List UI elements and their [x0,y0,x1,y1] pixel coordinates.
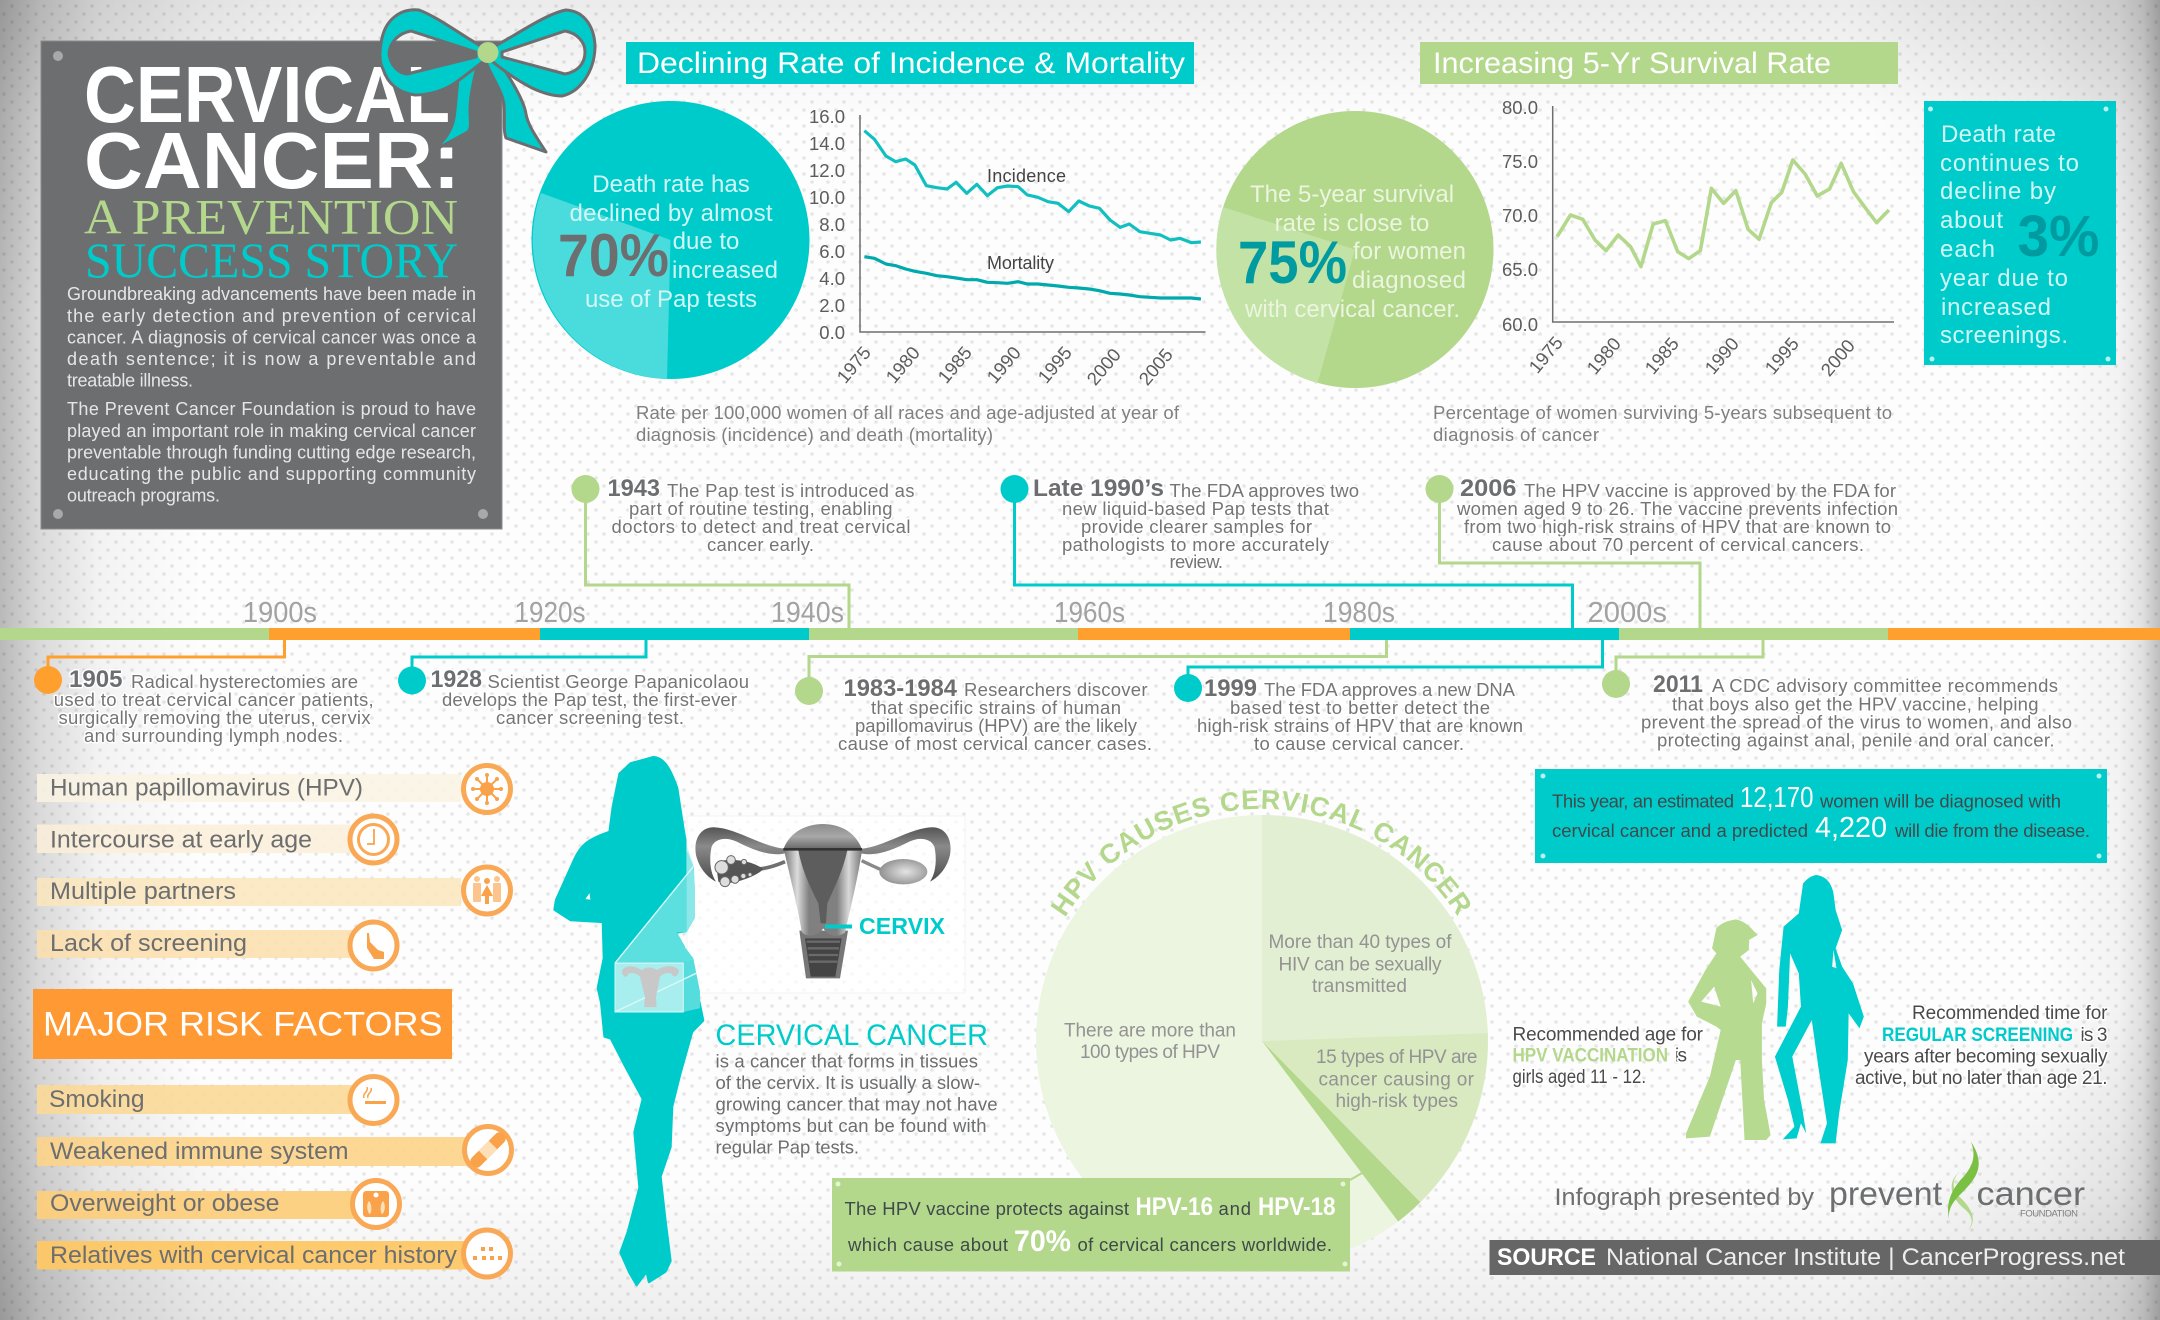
timeline [0,597,2160,640]
risk factor: human papillomavirus: Human papillomavirus (HPV) [50,774,363,802]
illustration: uterus diagram [695,824,951,978]
callout: estimated cases this year: women will be diagnosed with [1819,790,2061,812]
risk factor: intercourse at early age: Intercourse at early age [50,826,312,854]
magnifier: translucent view of the pelvis [615,851,700,1012]
pie label: 15 types [1316,1047,1478,1112]
pie label: 40 types [1268,932,1452,997]
logo: prevent cancer foundation: FOUNDATION [2020,1208,2078,1220]
source bar: SOURCE [1497,1244,1596,1271]
event: 1905: Radical hysterectomies are [131,671,358,692]
callout: death rate continues to decline 3%: year due to [1940,265,2068,292]
y axis labels: 75.0 [1502,151,1538,172]
ovaries [879,859,927,884]
event: 2011: prevent the spread of the virus to women, and also [1641,712,2072,732]
callout: death rate continues to decline 3%: screenings. [1940,322,2068,349]
event: 1943: part of routine testing, enabling [629,498,892,519]
x axis labels: 2000 [1816,335,1859,380]
event: 1999: high-risk strains of HPV that are known [1197,715,1523,736]
intro text: cancer. A diagnosis of cervical cancer was once a [67,328,477,348]
x axis labels: 2005 [1134,344,1177,389]
heading: major risk factors: MAJOR RISK FACTORS [43,1006,442,1044]
intro text: educating the public and supporting community [67,464,476,484]
caption: rate per 100,000: diagnosis (incidence) and death (mortality) [636,424,993,445]
risk factor: lack of screening: Lack of screening [50,930,247,957]
icon: cigarette [350,1076,397,1124]
heading: increasing 5-year survival rate [1420,42,1898,84]
callout: HPV vaccine protection: and [1218,1198,1251,1219]
callout: death rate continues to decline 3%: about [1940,207,2003,234]
callout: HPV vaccine protection: 70% [1014,1225,1071,1258]
intro text: preventable through funding cutting edge research, [67,442,476,462]
event: 1983-1984: cause of most cervical cancer cases. [838,733,1152,754]
event: late 1990s: review. [1170,551,1223,572]
pie label: 15 types: 15 types of HPV are [1316,1047,1478,1068]
text block: HPV vaccination age: is [1675,1046,1687,1066]
timeline bar [0,628,2160,640]
event: 1983-1984: 1983-1984 [844,675,958,702]
text block: regular screening: active, but no later than age 21. [1855,1068,2108,1089]
event: 1999: to cause cervical cancer. [1254,733,1464,754]
event: 2006: cause about 70 percent of cervical cancers. [1492,534,1864,555]
x axis labels: 1975 [1524,332,1567,377]
event: 2011 [1602,640,2072,750]
event: 2011: A CDC advisory committee recommends [1712,675,2058,696]
illustration: girl silhouette [1686,919,1771,1140]
event: 2006: The HPV vaccine is approved by the FDA for [1524,480,1896,501]
icon: teal ribbon bow [380,10,595,152]
event: late 1990s: new liquid-based Pap tests that [1062,498,1329,519]
line chart: survival rate [1502,97,1894,380]
intro text: the early detection and prevention of cervical [67,306,476,326]
callout: death rate continues to decline 3%: 3% [2018,204,2100,269]
y axis labels: 2.0 [819,295,845,316]
y axis labels: 12.0 [809,160,845,181]
event: 2006: from two high-risk strains of HPV that are known to [1464,516,1891,537]
callout: HPV vaccine protection: HPV-18 [1258,1193,1336,1221]
y axis labels [809,106,845,343]
event: late 1990s [1000,475,1572,628]
icon: hand [350,922,397,969]
event: 1999: The FDA approves a new DNA [1264,679,1516,700]
callout: estimated cases this year: This year, an estimated [1552,790,1734,812]
callout: HPV vaccine protection: HPV-16 [1136,1193,1213,1221]
event: 1905: surgically removing the uterus, cervix [58,707,371,728]
incidence line [864,131,1201,243]
callout: death rate continues to decline 3%: decline by [1940,178,2056,205]
intro text: treatable illness. [67,370,193,390]
callout: death rate continues to decline 3%: increased [1941,294,2051,321]
pie label: 15 types: cancer causing or [1318,1070,1475,1090]
x axis labels: 1975 [832,342,875,387]
callout: death rate continues to decline 3%: Death rate [1941,121,2056,148]
intro text: outreach programs. [67,486,220,506]
callout: death rate continues to decline 3% [1924,101,2116,365]
event: 2006: women aged 9 to 26. The vaccine prevents infection [1456,498,1898,519]
text block: cervical cancer definition: is a cancer that forms in tissues [716,1050,978,1072]
icon: bathroom scale [352,1180,400,1228]
x axis labels: 1990 [982,342,1025,387]
risk factor: weakened immune system [37,1126,512,1174]
decade labels: 1980s [1323,597,1395,629]
event: 1943: 1943 [608,475,660,502]
decade labels: 1960s [1054,597,1125,629]
text block: regular screening: REGULAR SCREENING [1882,1025,2073,1046]
pie callout: 75% survival [1216,111,1494,388]
event: 2011: 2011 [1653,671,1703,698]
y axis labels: 6.0 [819,241,845,262]
x axis labels: 1980 [881,342,924,387]
pie callout: 75% survival: The 5-year survival [1250,181,1454,208]
x axis labels: 1985 [1640,333,1683,378]
event: 1928: develops the Pap test, the first-ever [442,689,737,710]
icon: bandage [464,1126,512,1174]
event: 2011: protecting against anal, penile and oral cancer. [1657,730,2054,750]
event: 1999: based test to better detect the [1230,697,1490,718]
callout: HPV vaccine protection: of cervical cancers worldwide. [1078,1234,1332,1255]
logo: prevent cancer foundation [1829,1142,2085,1231]
text block: cervical cancer definition [716,1019,998,1158]
event: 2011: that boys also get the HPV vaccine, helping [1672,694,2038,714]
source bar [1490,1240,2160,1275]
series labels: Incidence [987,166,1066,186]
event: 1928: Scientist George Papanicolaou [488,671,749,692]
y axis labels: 4.0 [819,268,845,289]
icon: family tree [464,1230,510,1277]
x axis labels: 1980 [1582,333,1625,378]
series labels: Mortality [987,253,1054,273]
risk factor: smoking: Smoking [49,1086,144,1113]
event: late 1990s: The FDA approves two [1170,480,1359,501]
illustration: woman silhouette, screening [1775,875,1864,1143]
event: late 1990s: pathologists to more accurately [1062,534,1330,555]
heading: major risk factors [33,989,452,1059]
event: 2006: 2006 [1460,475,1516,502]
logo: prevent cancer foundation: cancer [1976,1175,2085,1212]
callout: HPV vaccine protection: The HPV vaccine protects against [844,1198,1129,1219]
pie callout: death rate declined 70%: use of Pap tests [585,286,757,313]
illustration: woman silhouette [555,757,703,1285]
pie label: 40 types: transmitted [1312,976,1407,997]
uterus body [783,824,862,849]
risk factor: overweight or obese: Overweight or obese [50,1190,280,1217]
x axis labels: 1990 [1700,333,1743,378]
y axis labels: 65.0 [1502,259,1538,280]
event: 2006 [1426,475,1898,628]
pie label: 100 types: 100 types of HPV [1080,1042,1220,1063]
small grey uterus [622,966,679,1007]
event: 1905: 1905 [69,666,122,693]
event: 1943 [572,475,914,628]
x axis labels [1524,332,1859,380]
intro text: The Prevent Cancer Foundation is proud to have [67,399,476,419]
x axis labels [832,342,1177,389]
decade labels: 1900s [243,597,317,629]
pie callout: death rate declined 70%: due to [673,228,739,255]
text block: HPV vaccination age: girls aged 11 - 12. [1512,1067,1646,1088]
text block: regular screening: years after becoming sexually [1864,1046,2108,1068]
panel: title and introduction [41,41,502,529]
pie label: 15 types: high-risk types [1336,1091,1458,1112]
callout: estimated cases this year: cervical cancer and a predicted [1552,820,1808,841]
event: 1999: 1999 [1204,675,1257,702]
survival line [1557,160,1889,267]
callout: estimated cases this year: 4,220 [1815,812,1887,844]
heading: increasing 5-year survival rate: Increasing 5-Yr Survival Rate [1433,47,1831,80]
risk factor: multiple partners [37,867,510,914]
text block: cervical cancer definition: growing cancer that may not have [716,1094,998,1114]
subtitle: a prevention success story: SUCCESS STORY [85,232,458,288]
pie callout: death rate declined 70%: declined by almost [570,200,773,227]
text block: HPV vaccination age [1512,1024,1704,1088]
pie callout: 75% survival: 75% [1238,229,1347,296]
risk factor: multiple partners: Multiple partners [50,878,236,905]
pie callout: death rate declined 70%: 70% [558,222,669,289]
pie callout: 75% survival: rate is close to [1275,210,1429,237]
caption: rate per 100,000: Rate per 100,000 women of all races and age-adjusted at year of [636,402,1180,423]
y axis labels [1502,97,1538,335]
icon: clock [350,816,397,863]
x axis labels: 1995 [1760,333,1803,378]
text block: regular screening [1855,1003,2108,1089]
panel: uterus close-up card [687,816,965,993]
pie callout: 75% survival: for women [1353,238,1466,265]
pie callout: 75% survival: diagnosed [1352,267,1466,294]
callout: estimated cases this year: 12,170 [1740,782,1814,814]
callout: estimated cases this year: will die from the disease. [1894,820,2090,841]
risk factor: smoking [37,1076,397,1124]
risk factor: relatives with cervical cancer history [37,1230,510,1277]
text block: cervical cancer definition: of the cervix. It is usually a slow- [716,1072,980,1093]
event: 1983-1984: papillomavirus (HPV) are the likely [855,715,1138,736]
event: 1928: 1928 [430,666,482,693]
text block: regular screening: is 3 [2080,1025,2108,1046]
event: 1943: The Pap test is introduced as [667,480,914,501]
x axis labels: 1995 [1033,342,1076,387]
line chart: incidence and mortality [809,106,1206,389]
callout: death rate continues to decline 3%: continues to [1940,150,2079,177]
event: 1928: cancer screening test. [496,707,684,728]
event: 1983-1984: that specific strains of human [871,697,1121,718]
pie label: 100 types: There are more than [1064,1020,1236,1042]
icon: people [464,867,510,914]
event: 1983-1984: Researchers discover [964,679,1148,700]
intro text [67,284,477,506]
y axis labels: 16.0 [809,106,845,127]
y axis labels: 8.0 [819,214,845,235]
callout: HPV vaccine protection: which cause about [847,1234,1008,1255]
decade labels: 1920s [514,597,586,629]
event: 1905: used to treat cervical cancer patients, [54,689,374,710]
event: late 1990s: provide clearer samples for [1081,516,1312,537]
source bar: National Cancer Institute | CancerProgress.net [1606,1244,2125,1271]
title: cervical cancer [84,50,460,205]
risk factor: overweight or obese [37,1180,400,1228]
subtitle: a prevention success story [84,188,458,288]
caption: rate per 100,000 [636,402,1180,445]
callout: death rate continues to decline 3%: each [1940,236,1995,263]
caption: percentage of women surviving: Percentage of women surviving 5-years subsequent to [1433,402,1892,423]
risk factor: weakened immune system: Weakened immune system [50,1138,348,1165]
pie chart: HPV types [1036,790,1488,1249]
y axis labels: 70.0 [1502,205,1538,226]
text block: cervical cancer definition: CERVICAL CANCER [716,1019,988,1052]
pie callout: death rate declined 70% [532,101,810,379]
event: 1928 [398,640,749,728]
pie label: 40 types: HIV can be sexually [1278,954,1442,976]
text: infograph presented by: Infograph presented by [1554,1184,1815,1211]
event: 1943: cancer early. [707,534,814,555]
pie callout: 75% survival: with cervical cancer. [1244,296,1460,323]
pie callout: death rate declined 70%: increased [672,257,778,284]
subtitle: a prevention success story: A PREVENTION [84,188,458,244]
event: 1999 [1174,640,1602,754]
y axis labels: 80.0 [1502,97,1538,118]
label: cervix pointer: CERVIX [859,913,945,939]
text block: cervical cancer definition: regular Pap tests. [716,1136,859,1158]
decade labels: 2000s [1588,597,1667,629]
decade labels [243,597,1667,629]
pie callout: death rate declined 70%: Death rate has [592,171,750,198]
title: cervical cancer: CANCER: [84,116,460,205]
curved heading: HPV causes cervical cancer: HPV CAUSES CERVICAL CANCER [1050,790,1470,916]
mortality line [864,257,1201,299]
icon: virus [464,766,510,812]
text block: regular screening: Recommended time for [1912,1003,2108,1024]
text block: cervical cancer definition: symptoms but can be found with [716,1115,986,1136]
event: 1983-1984 [795,640,1386,754]
x axis labels: 1985 [933,342,976,387]
title: cervical cancer: CERVICAL [84,50,450,139]
pie label: 100 types [1064,1020,1236,1063]
risk factor: relatives with cervical cancer history: Relatives with cervical cancer history [50,1242,458,1269]
event: 1905 [34,640,374,746]
event: 1905: and surrounding lymph nodes. [84,725,343,746]
y axis labels: 10.0 [809,187,845,208]
text block: HPV vaccination age: HPV VACCINATION [1512,1046,1668,1066]
decade labels: 1940s [771,597,844,629]
logo: prevent cancer foundation: prevent [1829,1175,1942,1212]
callout: estimated cases this year [1535,769,2107,863]
event: 1943: doctors to detect and treat cervical [612,516,910,537]
y axis labels: 14.0 [809,133,845,154]
pie label: 40 types: More than 40 types of [1268,932,1452,953]
intro text: played an important role in making cervical cancer [67,421,476,441]
intro text: death sentence; it is now a preventable and [67,349,476,369]
series labels [987,166,1066,273]
callout: HPV vaccine protection [832,1173,1362,1272]
y axis labels: 60.0 [1502,314,1538,335]
risk factor: lack of screening [37,922,397,969]
risk factor: intercourse at early age [37,816,397,863]
intro text: Groundbreaking advancements have been made in [67,284,476,304]
x axis labels: 2000 [1082,344,1125,389]
caption: percentage of women surviving [1433,402,1892,445]
risk factor: human papillomavirus [37,766,510,812]
event: late 1990s: Late 1990’s [1033,475,1164,502]
text block: HPV vaccination age: Recommended age for [1512,1024,1704,1046]
caption: percentage of women surviving: diagnosis of cancer [1433,424,1599,445]
y axis labels: 0.0 [819,322,845,343]
heading: declining rate of incidence and mortality: Declining Rate of Incidence & Mortality [637,47,1185,80]
